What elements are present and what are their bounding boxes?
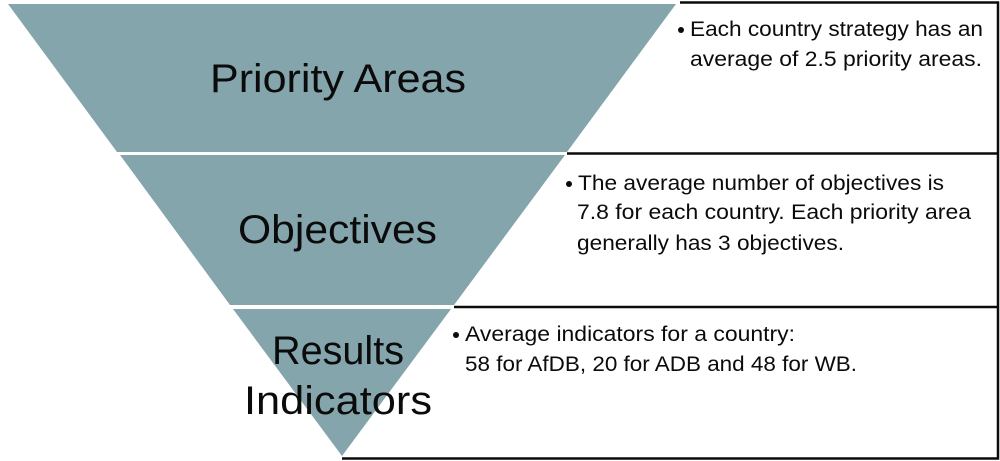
text block: results indicators note [453,323,857,376]
text block: priority areas note [678,18,983,71]
text block: priority areas note: average of 2.5 priority areas. [690,48,982,71]
heading: objectives: Objectives [238,208,437,252]
heading: priority areas: Priority Areas [210,57,466,101]
text block: objectives note: generally has 3 objectives. [577,232,844,255]
text block: results indicators note: 58 for AfDB, 20 for ADB and 48 for WB. [465,353,857,376]
panel: outlined text boxes [342,2,998,458]
heading: results indicators: Results [272,329,404,373]
panel: priority areas funnel tier [8,4,676,152]
text block: objectives note: The average number of objectives is [578,172,944,195]
panel: results indicators funnel tier [233,309,451,456]
text block: objectives note: 7.8 for each country. Each priority area [577,201,971,224]
text block: results indicators note: Average indicators for a country: [465,323,795,346]
text block: objectives note [566,172,971,255]
heading: results indicators: Indicators [244,379,432,423]
heading: results indicators [244,329,432,423]
panel: objectives funnel tier [120,155,565,305]
text block: priority areas note: Each country strategy has an [690,18,983,41]
